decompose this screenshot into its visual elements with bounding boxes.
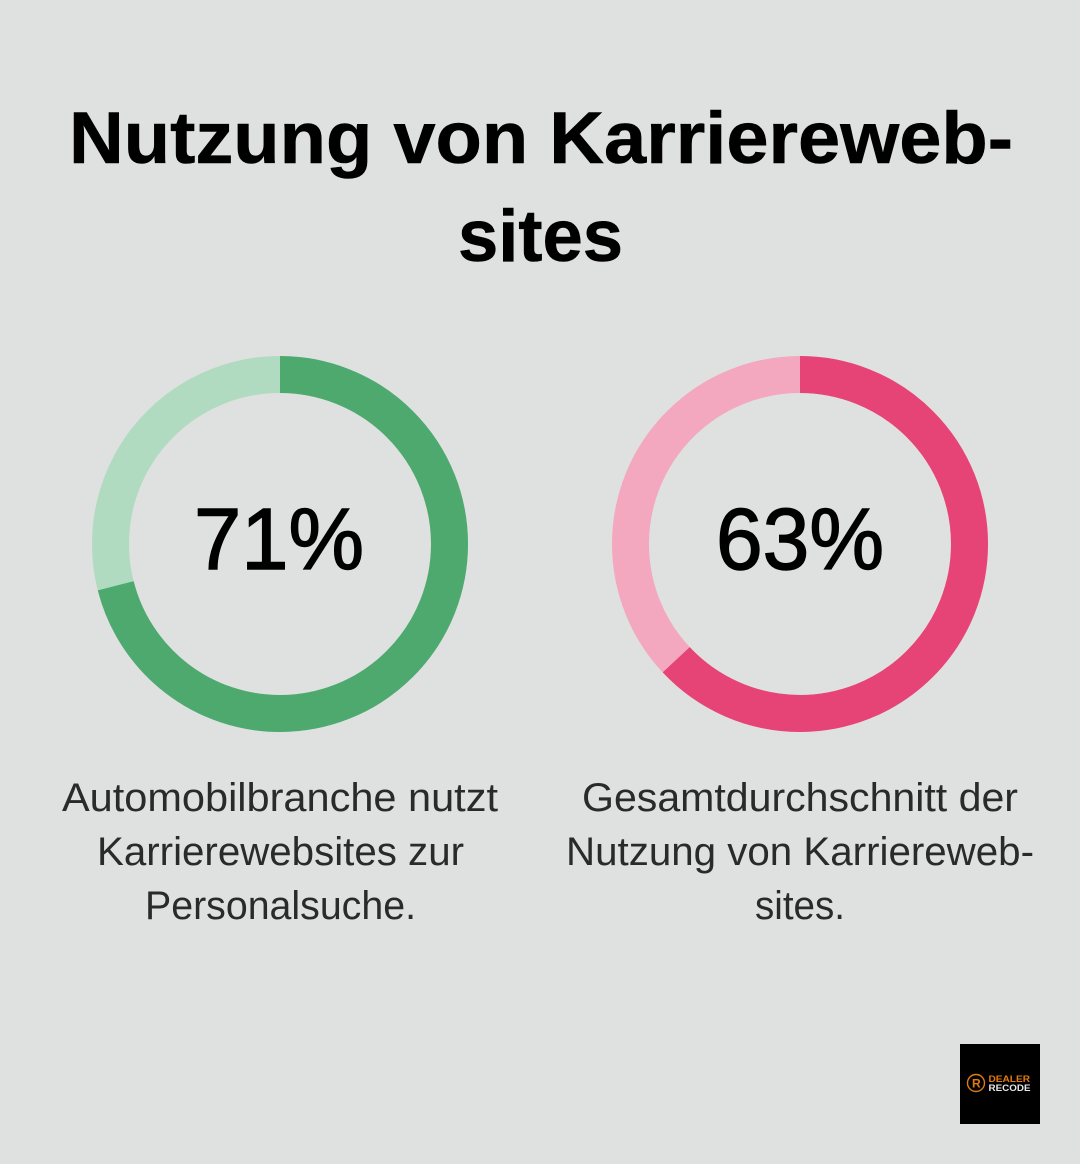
title: sites xyxy=(458,196,623,277)
title: Nutzung von Karriereweb- xyxy=(69,98,1013,179)
description: Automobilbranche xyxy=(62,776,498,928)
icon: R ring: R xyxy=(972,1076,981,1090)
title xyxy=(69,98,1013,277)
description: Gesamtdurchschnitt: Nutzung von Karriereweb- xyxy=(566,830,1034,874)
wordmark: RECODE xyxy=(988,1083,1030,1094)
logo: Dealer Recode xyxy=(960,1044,1040,1124)
description: Gesamtdurchschnitt: Gesamtdurchschnitt der xyxy=(582,776,1018,820)
panel: Automobilbranche 71% xyxy=(62,374,498,928)
description: Automobilbranche: Automobilbranche nutzt xyxy=(62,776,498,820)
description: Gesamtdurchschnitt: sites. xyxy=(755,884,845,928)
stat: 63%: 63% xyxy=(716,491,884,588)
donut chart: 63% xyxy=(630,374,970,714)
description: Automobilbranche: Personalsuche. xyxy=(145,884,416,928)
description: Automobilbranche: Karrierewebsites zur xyxy=(97,830,464,874)
stat: 71%: 71% xyxy=(194,491,364,588)
wordmark xyxy=(988,1074,1030,1094)
panel: Gesamtdurchschnitt 63% xyxy=(566,374,1034,928)
donut chart: 71% xyxy=(110,374,450,714)
description: Gesamtdurchschnitt xyxy=(566,776,1034,928)
wordmark: DEALER xyxy=(988,1074,1030,1085)
